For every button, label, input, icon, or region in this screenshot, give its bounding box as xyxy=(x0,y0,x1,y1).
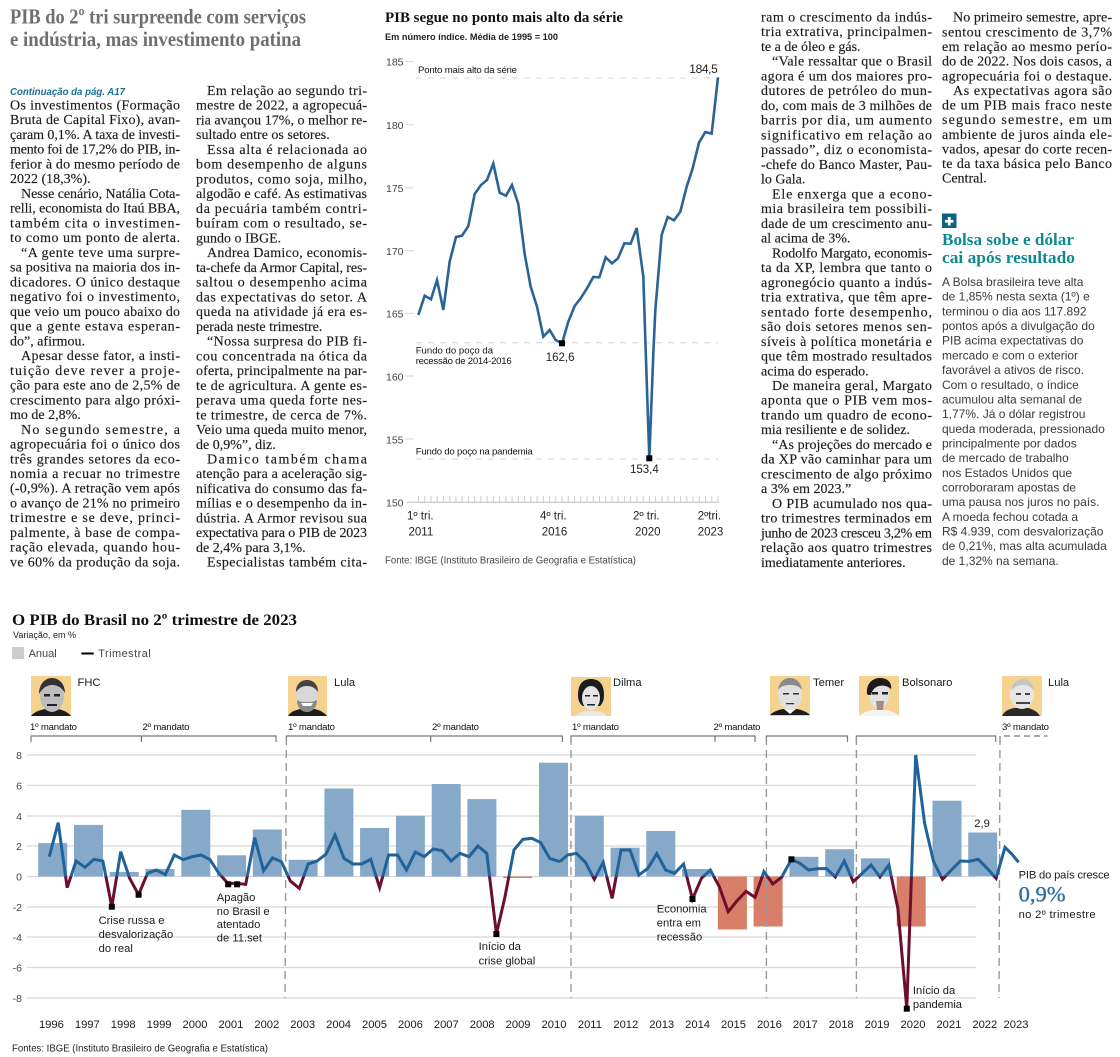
sidebar text: 1,77%. Já o dólar registrou xyxy=(942,407,1085,421)
annotation: blackout and 9/11 xyxy=(217,892,270,944)
annotation: Russian crisis xyxy=(99,915,173,955)
x axis labels: 2020 xyxy=(635,526,661,538)
text column 1: mento foi de 17,2% do PIB, in- xyxy=(10,143,180,158)
text column 1: tuição deve rever a proje- xyxy=(10,364,180,379)
x axis years: 2004 xyxy=(326,1019,351,1031)
text column 2: de 0,9%”, diz. xyxy=(196,438,276,453)
text column 4: te da taxa básica pelo Banco xyxy=(942,157,1112,172)
text column 1: Os investimentos (Formação xyxy=(10,98,180,114)
x axis years: 1998 xyxy=(111,1019,136,1031)
x axis years: 2003 xyxy=(290,1019,315,1031)
y axis labels: 0 xyxy=(16,872,22,884)
chart annotations xyxy=(416,62,718,476)
annotation: global crisis: crise global xyxy=(479,956,535,968)
text column 1: Apesar desse fator, a insti- xyxy=(21,349,180,364)
text column 2: Veio uma queda muito menor, xyxy=(196,423,367,438)
y axis labels: 180 xyxy=(386,120,404,132)
sidebar text: corroboraram apostas de xyxy=(942,480,1076,494)
text column 2: saltou o desempenho acima xyxy=(196,276,368,291)
name: Lula: Lula xyxy=(334,677,356,689)
text column 4: ambiente de juros ainda ele- xyxy=(942,128,1112,143)
quarterly line above zero xyxy=(48,754,1020,876)
y axis labels xyxy=(13,750,22,1005)
sidebar text: pontos após a divulgação do xyxy=(942,319,1095,333)
x axis years: 2010 xyxy=(542,1019,566,1031)
quarterly line below zero xyxy=(64,876,998,1006)
x axis years: 2011 xyxy=(578,1019,602,1031)
sidebar text: de 1,85% nesta sexta (1º) e xyxy=(942,290,1090,304)
presidential term brackets xyxy=(30,722,1049,742)
text column 1: crescimento para algo próxi- xyxy=(10,393,180,408)
text column 3: junho de 2023 cresceu 3,2% em xyxy=(760,526,932,541)
text column 2: nificativa do consumo das fa- xyxy=(196,482,367,497)
text column 2: ta-chefe da Armor Capital, res- xyxy=(196,261,367,276)
annotation: recession: entra em xyxy=(657,918,701,930)
headline: e indústria, mas investimento patina xyxy=(10,27,301,51)
text column 4: em relação ao mesmo perío- xyxy=(942,40,1112,55)
data line xyxy=(418,77,718,458)
name: Bolsonaro: Bolsonaro xyxy=(902,677,952,689)
text column 1: ve 60% da produção da soja. xyxy=(10,555,180,570)
sidebar text: PIB acima expectativas do xyxy=(942,334,1084,348)
icon: plus box xyxy=(942,214,956,228)
y axis labels: 175 xyxy=(386,183,404,195)
text column 1: nomia a recuar no trimestre xyxy=(10,467,180,482)
text column 3: são dois setores menos sen- xyxy=(761,320,932,335)
annotation: global crisis xyxy=(479,941,535,968)
sidebar text: uma pausa nos juros no país. xyxy=(942,495,1099,509)
x axis years: 2005 xyxy=(362,1019,387,1031)
x axis years: 2023 xyxy=(1004,1019,1028,1031)
sidebar text: de 0,21%, mas alta acumulada xyxy=(942,539,1107,553)
headline: PIB do 2º tri surpreende com serviços xyxy=(10,4,306,28)
lower chart subtitle: Variação, em % xyxy=(13,630,76,640)
text column 1: três grandes setores da eco- xyxy=(10,452,180,467)
text column 4: do de 2022. Nos dois casos, a xyxy=(942,55,1113,70)
text column 2: dústria. A Armor revisou sua xyxy=(196,512,368,526)
presidential term brackets: 2º mandato xyxy=(714,722,760,733)
x axis labels xyxy=(407,510,723,538)
text column 3: mia resiliente e de solidez. xyxy=(761,423,910,438)
text column 2: te trimestre, de cerca de 7%. xyxy=(196,408,367,423)
text column 1: Bruta de Capital Fixo), avan- xyxy=(10,113,180,128)
y axis labels: 8 xyxy=(16,750,22,762)
text column 2: cou concentrada na ótica da xyxy=(196,349,368,364)
bar value label: 2,9 xyxy=(974,818,990,830)
y axis labels: -8 xyxy=(13,993,22,1005)
annotation: pandemic: Início da xyxy=(913,985,956,997)
sidebar heading: cai após resultado xyxy=(942,248,1075,267)
text column 1: agropecuária foi o único dos xyxy=(10,438,180,452)
text column 2 xyxy=(196,84,368,571)
text column 3: que têm mostrado resultados xyxy=(761,350,932,364)
text column 3: dade de um crescimento anu- xyxy=(761,217,932,232)
text column 3: ram o crescimento da indús- xyxy=(761,10,932,26)
annotation: blackout and 9/11: de 11.set xyxy=(217,932,263,944)
annual bars xyxy=(38,763,997,876)
text column 1: mo de 2,8%. xyxy=(10,408,81,423)
x axis years: 2017 xyxy=(793,1019,818,1031)
text column 2: bom desempenho de alguns xyxy=(196,158,367,173)
x axis years: 2021 xyxy=(936,1019,961,1031)
text column 3: “Vale ressaltar que o Brasil xyxy=(772,55,932,70)
text column 4: segundo semestre, em um xyxy=(942,113,1112,128)
text column 1: 2022 (18,3%). xyxy=(10,172,90,187)
text column 2: sultado entre os setores. xyxy=(196,128,330,143)
text column 2: oferta, principalmente na par- xyxy=(196,364,367,379)
text column 2: produtos, como soja, milho, xyxy=(196,172,367,187)
text column 3: significativo em relação ao xyxy=(761,128,932,143)
text column 1: que veio um pouco abaixo do xyxy=(10,305,180,320)
text column 3: barris por dia, um aumento xyxy=(761,114,932,129)
continuation tag: Continuação da pág. A17 xyxy=(10,86,126,98)
x axis years: 2014 xyxy=(685,1019,710,1031)
annotation: blackout and 9/11: Apagão xyxy=(217,892,255,904)
chart subtitle: Em número índice. Média de 1995 = 100 xyxy=(385,32,558,43)
text column 2: Essa alta é relacionada ao xyxy=(207,143,367,158)
chart: PIB index line xyxy=(385,10,723,566)
name: Lula: Lula xyxy=(1048,677,1070,689)
annotation: Russian crisis: do real xyxy=(99,943,133,955)
y axis labels: 155 xyxy=(386,434,404,446)
x axis years: 2022 xyxy=(972,1019,997,1031)
chart annotations: 153,4 xyxy=(630,464,659,476)
text column 2: de 2,4% para 3,1%. xyxy=(196,541,306,556)
text column 4: sentou crescimento de 3,7% xyxy=(942,25,1112,40)
text column 2: atenção para a aceleração sig- xyxy=(196,467,367,482)
text column 1: Nesse cenário, Natália Cota- xyxy=(21,187,180,202)
text column 1: sa positiva na maioria dos in- xyxy=(10,261,180,276)
text column 1: (-0,9%). A retração vem após xyxy=(10,482,180,497)
sidebar text: mercado e com o exterior xyxy=(942,348,1078,362)
event markers xyxy=(109,856,910,1012)
text column 3: crescimento de algo próximo xyxy=(761,467,932,482)
text column 2: “Nossa surpresa do PIB fi- xyxy=(207,335,367,350)
text column 4: de um PIB mais fraco neste xyxy=(942,98,1112,114)
x axis labels: 2011 xyxy=(408,526,433,538)
sidebar text: de mercado de trabalho xyxy=(942,451,1069,465)
text column 3: passado”, diz o economista- xyxy=(761,143,932,158)
y axis labels: 6 xyxy=(16,780,22,792)
x axis labels: 4º tri. xyxy=(540,510,567,522)
text column 3: tro trimestres terminados em xyxy=(761,512,932,527)
x axis years: 1997 xyxy=(75,1019,100,1031)
text column 2: Em relação ao segundo tri- xyxy=(207,84,367,99)
presidential term brackets: 2º mandato xyxy=(142,722,190,733)
text column 3 xyxy=(760,10,932,571)
name: FHC: FHC xyxy=(78,677,100,689)
headline xyxy=(10,4,306,51)
presidential term brackets: 1º mandato xyxy=(572,722,619,733)
text column 2: gundo o IBGE. xyxy=(196,231,281,246)
presidential term brackets: 2º mandato xyxy=(432,722,479,733)
chart annotations: Fundo do poço da xyxy=(416,345,494,356)
chart annotations: recessão de 2014-2016 xyxy=(416,356,512,367)
text column 2: te de agricultura. A gente es- xyxy=(196,379,367,394)
text column 1: to como um ponto de alerta. xyxy=(10,231,180,246)
portrait: Temer xyxy=(770,676,810,716)
x axis years: 2009 xyxy=(506,1019,531,1031)
text column 3: agora é um dos maiores pro- xyxy=(761,70,932,84)
text column 2: mílias e o desempenho da in- xyxy=(196,497,367,512)
text column 2: Damico também chama xyxy=(207,452,368,468)
text column 3: tria extrativa, que têm apre- xyxy=(761,291,932,306)
y axis labels: 185 xyxy=(386,56,404,68)
lower chart source: Fontes: IBGE (Instituto Brasileiro de Geografia e Estatística) xyxy=(12,1044,268,1055)
text column 2: queda na atividade já era es- xyxy=(196,305,367,320)
chart annotations: 162,6 xyxy=(546,352,574,364)
annotation: Russian crisis: Crise russa e xyxy=(99,915,165,927)
sidebar text: A Bolsa brasileira teve alta xyxy=(942,275,1084,289)
text column 3: -chefe do Banco Master, Pau- xyxy=(761,158,932,173)
text column 2: perada neste trimestre. xyxy=(196,320,322,335)
text column 1: também cita o investimen- xyxy=(10,216,180,231)
annotation: pandemic: pandemia xyxy=(913,999,963,1011)
annotation: blackout and 9/11: no Brasil e xyxy=(217,906,270,918)
y axis labels: 2 xyxy=(16,841,22,853)
text column 3: te a de óleo e gás. xyxy=(761,40,861,55)
annotation: global crisis: Início da xyxy=(479,941,522,953)
text column 1: que a gente estava esperan- xyxy=(10,320,180,335)
x axis years: 2013 xyxy=(649,1019,674,1031)
y axis labels: -2 xyxy=(13,902,22,914)
legend xyxy=(12,647,151,660)
text column 3: O PIB acumulado nos qua- xyxy=(772,497,932,512)
legend: Trimestral xyxy=(98,648,151,660)
text column 3: Rodolfo Margato, economis- xyxy=(772,246,932,261)
text column 1: o avanço de 21% no primeiro xyxy=(10,496,180,512)
lower chart title: O PIB do Brasil no 2º trimestre de 2023 xyxy=(12,612,297,629)
x axis years: 2008 xyxy=(470,1019,495,1031)
text column 2: algodão e café. As estimativas xyxy=(196,187,367,202)
text column 1: ferior à do mesmo período de xyxy=(10,158,180,172)
callout: GDP growth: no 2º trimestre xyxy=(1019,909,1096,921)
text column 3: imediatamente anteriores. xyxy=(761,556,906,571)
text column 3: síveis à política monetária e xyxy=(761,335,932,350)
text column 4: agropecuária foi o destaque. xyxy=(942,69,1112,84)
presidential term brackets: 1º mandato xyxy=(30,722,77,733)
text column 2: da pecuária também contri- xyxy=(196,202,367,217)
y axis labels: 170 xyxy=(386,246,404,258)
sidebar text xyxy=(942,275,1107,568)
x axis years xyxy=(39,1019,1028,1031)
text column 1: do”, afirmou. xyxy=(10,334,85,349)
sidebar text: de 1,32% na semana. xyxy=(942,554,1059,568)
annotation: Russian crisis: desvalorização xyxy=(99,929,173,941)
text column 2: buíram com o resultado, se- xyxy=(196,217,367,232)
sidebar text: A moeda fechou cotada a xyxy=(942,510,1078,524)
sidebar heading xyxy=(942,230,1075,267)
text column 3: “As projeções do mercado e xyxy=(772,438,932,453)
y axis labels xyxy=(386,56,404,510)
sidebar text: Com o resultado, o índice xyxy=(942,378,1079,392)
x axis labels: 2016 xyxy=(542,526,567,538)
x axis years: 2012 xyxy=(613,1019,638,1031)
sidebar text: nos Estados Unidos que xyxy=(942,466,1072,480)
text column 1: trimestre e se deve, princi- xyxy=(10,511,180,526)
government divider lines xyxy=(285,737,1000,998)
annotation: recession: recessão xyxy=(657,932,702,944)
x axis years: 2020 xyxy=(901,1019,925,1031)
text column 2: perava uma queda forte nes- xyxy=(196,394,367,408)
text column 3: De maneira geral, Margato xyxy=(772,379,932,394)
text column 1: No segundo semestre, a xyxy=(21,423,181,438)
x axis years: 2006 xyxy=(398,1019,423,1031)
text column 1: relli, economista do Itaú BBA, xyxy=(10,202,180,217)
text column 1: palmente, à base de compa- xyxy=(10,526,180,541)
text column 2: ria avançou 17%, o melhor re- xyxy=(196,114,367,128)
text column 4: No primeiro semestre, apre- xyxy=(953,11,1112,26)
text column 3: sentado forte desempenho, xyxy=(761,305,932,320)
text column 3: aponta que o PIB vem mos- xyxy=(761,394,932,409)
text column 2: mestre de 2022, a agropecuá- xyxy=(196,99,367,114)
sidebar heading: Bolsa sobe e dólar xyxy=(942,230,1074,249)
y axis labels: -6 xyxy=(13,962,22,974)
text column 1: negativo foi o investimento, xyxy=(10,290,180,305)
text column 3: do, com mais de 3 milhões de xyxy=(761,99,932,114)
text column 3: relação aos quatro trimestres xyxy=(761,541,932,556)
text column 4 xyxy=(942,11,1113,187)
annotation: recession xyxy=(657,904,707,944)
sidebar text: acumulou alta semanal de xyxy=(942,392,1082,406)
text column 3: tria extrativa, principalmen- xyxy=(761,25,932,40)
x axis years: 1999 xyxy=(147,1019,172,1031)
text column 3: agronegócio quanto a indús- xyxy=(761,276,932,291)
x axis years: 2018 xyxy=(829,1019,854,1031)
text column 3: dutores de petróleo do mun- xyxy=(761,84,932,99)
x axis years: 2019 xyxy=(865,1019,890,1031)
x axis years: 2007 xyxy=(434,1019,459,1031)
y axis labels: 160 xyxy=(386,372,404,384)
x axis years: 2016 xyxy=(757,1019,782,1031)
legend: Anual xyxy=(29,648,57,660)
y axis labels: 150 xyxy=(386,498,404,510)
callout: GDP growth: PIB do país cresce xyxy=(1019,870,1110,882)
annual-quarterly GDP chart xyxy=(13,737,1110,1031)
text column 3: acima do esperado. xyxy=(761,364,869,379)
portrait: Dilma xyxy=(571,677,611,716)
sidebar text: principalmente por dados xyxy=(942,436,1077,450)
sidebar text: favorável a ativos de risco. xyxy=(942,363,1084,377)
text column 2: Andrea Damico, economis- xyxy=(207,246,367,261)
x axis labels: 2ºtri. xyxy=(698,510,721,522)
x axis years: 2000 xyxy=(183,1019,207,1031)
text column 3: trando um quadro de econo- xyxy=(761,408,932,424)
text column 1 xyxy=(10,98,181,570)
text column 2: Especialistas também cita- xyxy=(207,556,367,571)
y axis labels: 4 xyxy=(16,811,22,823)
text column 3: al acima de 3%. xyxy=(761,232,850,247)
text column 3: a 3% em 2023.” xyxy=(761,482,851,497)
y axis labels: 165 xyxy=(386,309,404,321)
chart source: Fonte: IBGE (Instituto Brasileiro de Geografia e Estatística) xyxy=(385,556,636,566)
chart annotations: 184,5 xyxy=(689,62,718,76)
x axis years: 2001 xyxy=(218,1019,243,1031)
portrait: FHC xyxy=(31,676,71,716)
text column 2: das expectativas do setor. A xyxy=(196,290,368,305)
low point markers xyxy=(559,340,652,461)
x axis years: 2002 xyxy=(254,1019,279,1031)
text column 1: ção para este ano de 2,5% de xyxy=(10,379,180,394)
text column 4: vados, apesar do corte recen- xyxy=(942,142,1112,158)
annotation: blackout and 9/11: atentado xyxy=(217,919,260,931)
text column 1: çaram 0,1%. A taxa de investi- xyxy=(10,128,180,143)
text column 4: As expectativas agora são xyxy=(953,84,1112,99)
chart annotations: Ponto mais alto da série xyxy=(418,65,517,76)
sidebar text: queda moderada, pressionado xyxy=(942,422,1105,436)
text column 3: Ele enxerga que a econo- xyxy=(772,187,932,202)
portrait: Lula 3rd term xyxy=(1002,676,1042,716)
portrait: Bolsonaro xyxy=(859,676,899,716)
text column 3: da XP vão caminhar para um xyxy=(761,453,932,468)
y axis labels: -4 xyxy=(13,932,22,944)
name: Temer: Temer xyxy=(813,677,844,689)
presidential term brackets: 1º mandato xyxy=(288,722,335,733)
x axis labels: 2023 xyxy=(698,526,723,538)
presidential term brackets: 3º mandato xyxy=(1002,722,1049,733)
x axis labels: 1º tri. xyxy=(407,510,434,522)
text column 2: expectativa para o PIB de 2023 xyxy=(196,526,367,541)
name: Dilma: Dilma xyxy=(613,677,642,689)
callout: GDP growth xyxy=(1019,870,1110,921)
text column 3: lo Gala. xyxy=(761,173,805,188)
text column 4: Central. xyxy=(942,172,987,187)
x axis years: 2015 xyxy=(721,1019,746,1031)
grid lines xyxy=(27,755,976,998)
chart annotations: Fundo do poço na pandemia xyxy=(416,447,533,458)
text column 3: mia brasileira tem possibili- xyxy=(761,202,932,217)
sidebar text: terminou o dia aos 117.892 xyxy=(942,304,1087,318)
callout: GDP growth: 0,9% xyxy=(1019,882,1066,906)
sidebar text: R$ 4.939, com desvalorização xyxy=(942,525,1104,539)
text column 1: “A gente teve uma surpre- xyxy=(21,246,180,261)
annotation: recession: Economia xyxy=(657,904,707,916)
x axis labels: 2º tri. xyxy=(633,510,660,522)
portrait: Lula xyxy=(288,676,327,716)
text column 1: dicadores. O único destaque xyxy=(10,275,180,290)
chart title: PIB segue no ponto mais alto da série xyxy=(385,10,624,26)
x axis years: 1996 xyxy=(39,1019,64,1031)
annotation: pandemic xyxy=(913,985,963,1011)
text column 3: ta da XP, lembra que tanto o xyxy=(761,261,932,276)
text column 1: ração elevada, quando hou- xyxy=(10,541,180,556)
